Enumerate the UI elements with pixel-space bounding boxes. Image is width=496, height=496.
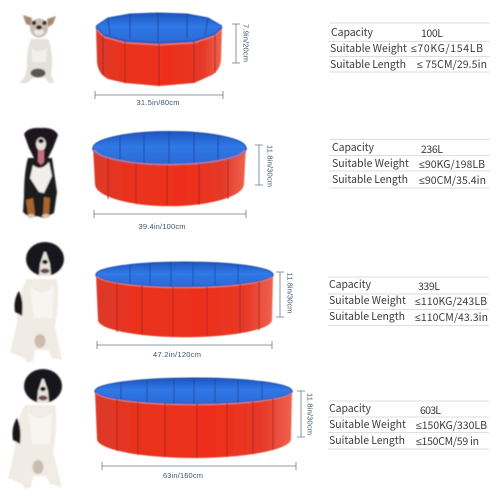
dog 4: Landseer [8, 369, 62, 489]
spec table 4: ≤150CM/59 in [416, 434, 479, 449]
spec table 3: Capacity [329, 277, 372, 292]
dimensions: pool 1: 31.5in/80cm [136, 98, 180, 107]
spec table 1: Suitable Weight [330, 41, 407, 56]
dimensions: pool 2: 39.4in/100cm [138, 222, 186, 231]
dimensions: pool 4: 63in/160cm [163, 471, 203, 480]
dimensions: pool 4: 11.8in/30cm [306, 393, 314, 435]
spec table 3: ≤110KG/243LB [415, 294, 487, 309]
spec table 2 [329, 140, 490, 188]
dimensions: pool 1 [95, 24, 250, 107]
spec table 2: ≤90CM/35.4in [419, 173, 486, 188]
spec table 3: 339L [418, 279, 440, 294]
spec table 4: Capacity [329, 401, 372, 416]
spec table 4: Suitable Weight [329, 417, 406, 432]
dog 1: small bulldog [20, 15, 56, 83]
spec table 4: ≤150KG/330LB [416, 418, 487, 433]
pool 4 [95, 378, 292, 458]
pool 1 [96, 13, 222, 86]
pool 2 [93, 132, 246, 206]
dimensions: pool 2 [94, 145, 274, 231]
dog 2: Bernese mountain dog [23, 128, 58, 218]
pool 3 [96, 262, 273, 337]
spec table 1 [329, 23, 490, 72]
spec table 3: Suitable Weight [329, 293, 406, 308]
spec table 3 [328, 277, 489, 326]
spec table 2: ≤90KG/198LB [419, 157, 485, 172]
spec table 2: Suitable Weight [332, 156, 409, 171]
dimensions: pool 1: 7.9in/20cm [242, 24, 250, 62]
spec table 1: 100L [421, 26, 443, 41]
spec table 4: Suitable Length [329, 433, 405, 448]
spec table 3: ≤110CM/43.3in [415, 310, 488, 325]
spec table 2: Capacity [332, 140, 375, 155]
dimensions: pool 3: 47.2in/120cm [153, 350, 201, 359]
spec table 1: ≤ 75CM/29.5in [417, 57, 487, 72]
dimensions: pool 4 [102, 391, 314, 480]
dog 3: Landseer [10, 242, 64, 363]
spec table 1: Capacity [331, 25, 374, 40]
dimensions: pool 2: 11.8in/30cm [266, 145, 274, 187]
dimensions: pool 3: 11.8in/30cm [286, 272, 294, 314]
spec table 1: ≤70KG/154LB [411, 41, 483, 56]
spec table 2: Suitable Length [332, 172, 408, 187]
spec table 4 [328, 401, 489, 449]
spec table 2: 236L [421, 142, 443, 157]
dimensions: pool 3 [97, 272, 294, 359]
spec table 1: Suitable Length [330, 57, 406, 72]
spec table 3: Suitable Length [329, 309, 405, 324]
spec table 4: 603L [420, 403, 441, 418]
